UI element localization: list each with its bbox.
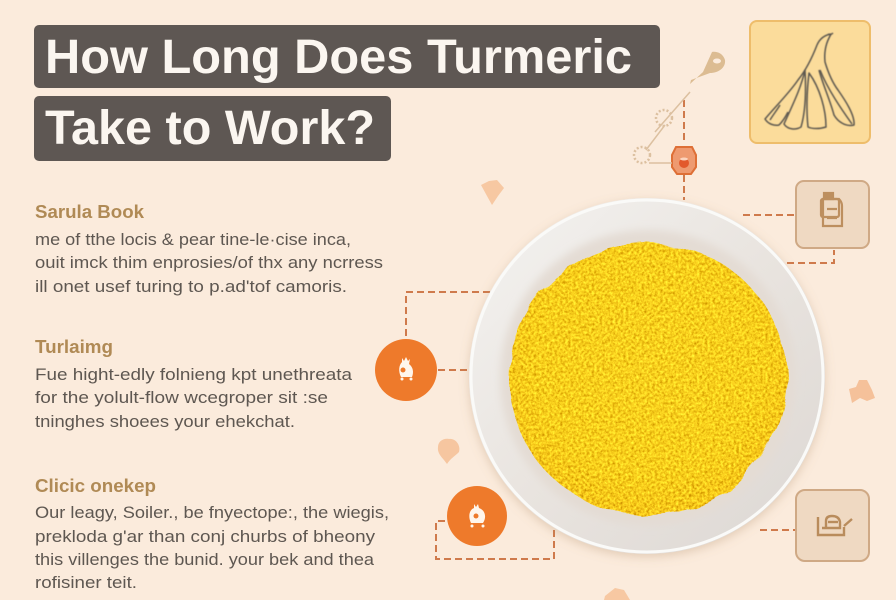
text block 3: rofisiner teit. bbox=[35, 573, 137, 592]
text block 2 bbox=[35, 337, 353, 431]
text block 3: prekloda g'ar than conj churbs of bheony bbox=[35, 527, 376, 546]
icon: orange circle lower bbox=[447, 486, 507, 546]
text block 1: ouit imck thim enprosies/of thx any ncrress bbox=[35, 253, 383, 272]
text block 2: Turlaimg bbox=[35, 337, 113, 357]
bowl of turmeric bbox=[469, 198, 825, 554]
text block 3: this villenges the bunid. your bek and thea bbox=[35, 550, 375, 569]
text block 1 bbox=[35, 202, 383, 296]
icon: orange circle upper bbox=[375, 339, 437, 401]
icon: faint spoon and flowers bbox=[634, 52, 725, 163]
text block 2: Fue hight-edly folnieng kpt unethreata bbox=[35, 365, 353, 384]
decorative blob: bottom bbox=[604, 588, 630, 600]
icon: turmeric root card bbox=[750, 21, 870, 143]
text block 3 bbox=[35, 476, 389, 592]
text block 3: Clicic onekep bbox=[35, 476, 156, 496]
decorative blob: right bbox=[849, 380, 875, 403]
icon: bottle card bbox=[796, 181, 869, 248]
text block 2: for the yolult-flow wcegroper sit :se bbox=[35, 388, 328, 407]
dashed connectors bbox=[406, 100, 834, 559]
title line 2: Take to Work? bbox=[45, 102, 375, 155]
text block 3: Our leagy, Soiler., be fnyectope:, the wiegis, bbox=[35, 503, 389, 522]
text block 1: Sarula Book bbox=[35, 202, 145, 222]
decorative blob: left bbox=[438, 439, 459, 464]
icon: orange hexagon badge bbox=[672, 147, 696, 174]
text block 1: me of tthe locis & pear tine-le·cise inca, bbox=[35, 230, 351, 249]
text block 1: ill onet usef turing to p.ad'tof camoris. bbox=[35, 277, 347, 296]
decorative blob: top bbox=[481, 180, 504, 205]
title bbox=[34, 25, 660, 161]
text block 2: tninghes shoees your ehekchat. bbox=[35, 412, 295, 431]
turmeric powder bbox=[509, 243, 787, 515]
icon: basket card bbox=[796, 490, 869, 561]
title line 1: How Long Does Turmeric bbox=[45, 31, 632, 84]
bowl bbox=[469, 198, 825, 554]
